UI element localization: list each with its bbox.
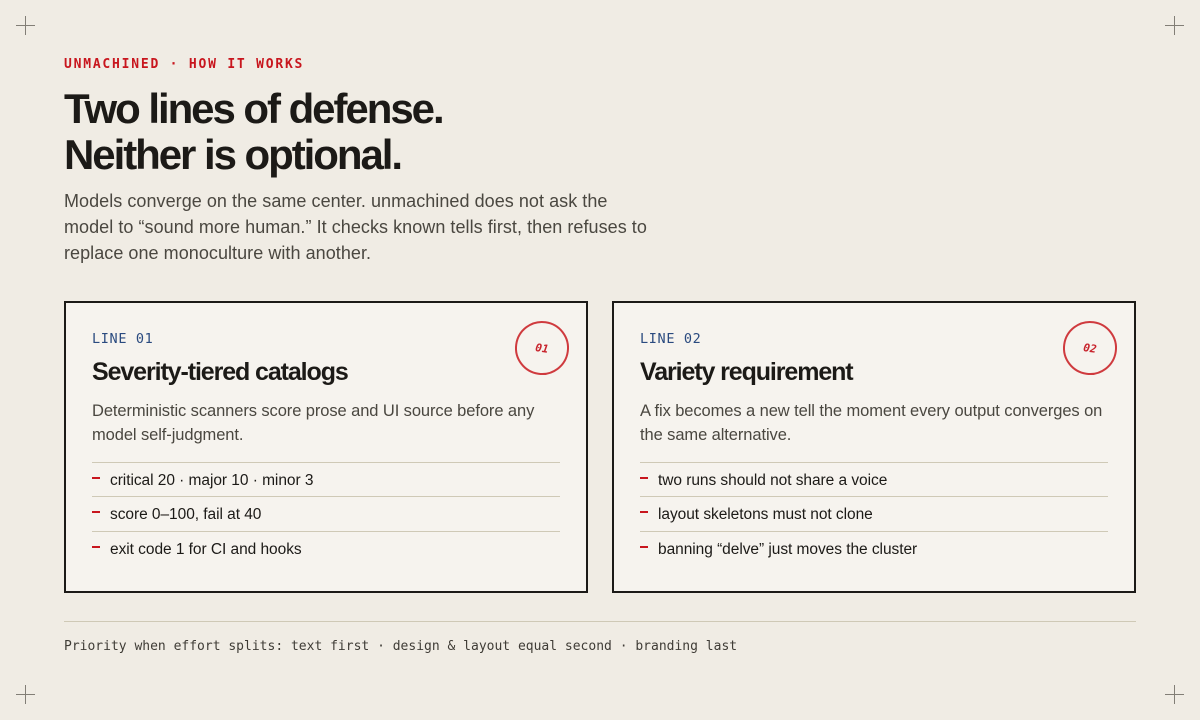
list: banning “delve” just moves the cluster	[658, 541, 917, 558]
intro paragraph: replace one monoculture with another.	[64, 243, 371, 263]
crop mark: top left	[16, 16, 35, 35]
crop mark: bottom left	[16, 685, 35, 704]
label: line 01: LINE 01	[92, 331, 153, 347]
title: Two lines of defense.	[64, 85, 443, 132]
list: exit code 1 for CI and hooks	[110, 541, 302, 558]
title: Neither is optional.	[64, 131, 401, 178]
list: score 0–100, fail at 40	[110, 506, 261, 523]
description	[92, 402, 534, 444]
description: A fix becomes a new tell the moment every output converges on	[640, 402, 1102, 420]
description: the same alternative.	[640, 426, 791, 444]
heading: variety requirement: Variety requirement	[640, 358, 853, 386]
stamp: 02	[1060, 318, 1120, 378]
list	[640, 462, 1108, 558]
list: layout skeletons must not clone	[658, 506, 873, 523]
intro paragraph: Models converge on the same center. unmachined does not ask the	[64, 191, 607, 211]
label: line 02: LINE 02	[640, 331, 701, 347]
footer note: Priority when effort splits: text first · design & layout equal second · branding last	[64, 639, 737, 654]
panel: line 02	[612, 301, 1136, 593]
list: critical 20 · major 10 · minor 3	[110, 472, 313, 489]
stamp: 01: 01	[534, 341, 549, 356]
footer rule	[64, 621, 1136, 622]
list	[92, 462, 560, 558]
description	[640, 402, 1102, 444]
heading: severity-tiered catalogs: Severity-tiered catalogs	[92, 358, 348, 386]
intro paragraph	[64, 191, 647, 263]
eyebrow: UNMACHINED · HOW IT WORKS	[64, 57, 304, 72]
description: Deterministic scanners score prose and UI source before any	[92, 402, 534, 420]
list: two runs should not share a voice	[658, 472, 887, 489]
description: model self-judgment.	[92, 426, 243, 444]
crop mark: bottom right	[1165, 685, 1184, 704]
panel: line 01	[64, 301, 588, 593]
stamp: 01	[512, 318, 572, 378]
stamp: 02: 02	[1082, 341, 1097, 356]
title	[64, 85, 443, 178]
crop mark: top right	[1165, 16, 1184, 35]
intro paragraph: model to “sound more human.” It checks known tells first, then refuses to	[64, 217, 647, 237]
